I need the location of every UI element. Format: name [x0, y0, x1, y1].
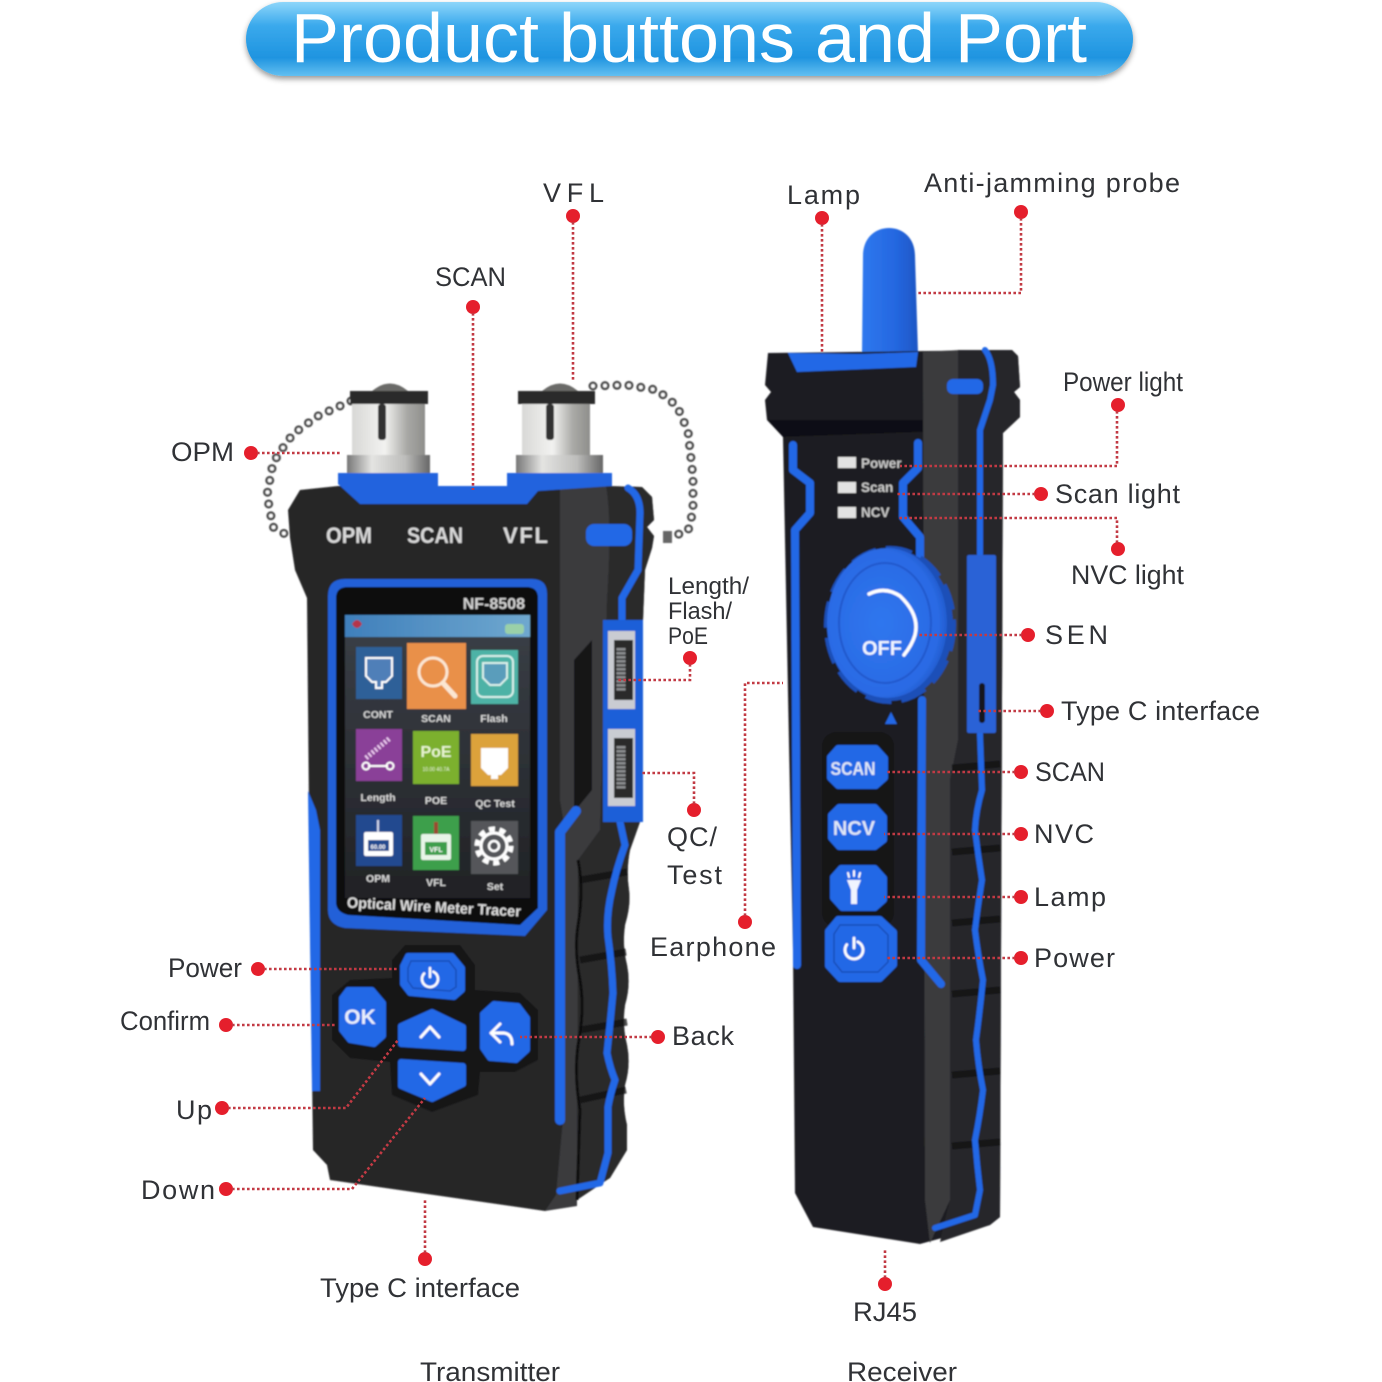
app tile PoE: POE — [425, 795, 447, 807]
callout SEN: SEN — [1045, 620, 1108, 650]
callout NVC light: NVC light — [1071, 560, 1184, 590]
app tile VFL: VFL — [426, 877, 446, 889]
receiver side block — [967, 555, 996, 733]
callout Scan light — [897, 479, 1180, 509]
app tile Length: Length — [360, 792, 396, 804]
receiver callouts — [787, 168, 1260, 1327]
receiver side panel — [940, 350, 1020, 1242]
knob — [827, 548, 953, 701]
callout Scan light: Scan light — [1055, 479, 1180, 509]
blue right inner stripe — [560, 811, 576, 1120]
top labels on device: OPM — [326, 523, 372, 548]
screen bezel — [328, 579, 547, 936]
callout Length Flash PoE: Flash/ — [668, 598, 732, 625]
app tile VFL — [413, 816, 459, 889]
callout Back — [520, 1021, 734, 1051]
callout Power right — [885, 943, 1115, 973]
app tile Set: Set — [487, 881, 504, 893]
button lamp — [833, 868, 884, 908]
strap slot — [586, 524, 632, 546]
callout QC Test — [640, 773, 722, 890]
callout Power light: Power light — [1063, 367, 1183, 397]
button cluster surround — [332, 945, 538, 1112]
status bar — [345, 615, 530, 637]
callout Type C receiver: Type C interface — [1061, 696, 1260, 726]
body side band — [545, 486, 610, 1211]
LED indicators: Scan — [861, 480, 893, 495]
blue left stripe — [308, 791, 320, 1091]
callout QC Test: QC/ — [667, 822, 717, 852]
transmitter callouts — [120, 178, 783, 1303]
body side panel — [577, 486, 654, 1200]
callout Back: Back — [672, 1021, 734, 1051]
LED indicators: NCV — [861, 505, 890, 520]
app tile OPM — [356, 815, 402, 885]
ball chain left — [267, 401, 351, 534]
callout Earphone: Earphone — [650, 932, 776, 962]
LED indicators: Power — [861, 456, 902, 471]
button back — [483, 1004, 527, 1060]
callout Anti-jamming probe — [917, 168, 1180, 293]
button SCAN: SCAN — [830, 759, 876, 779]
knob: OFF — [862, 638, 902, 660]
button down — [401, 1062, 463, 1099]
callout NVC light — [898, 518, 1184, 590]
app tile PoE: PoE — [420, 744, 452, 761]
screen side recess — [574, 640, 592, 812]
right trim — [903, 443, 941, 984]
callout Up — [176, 1040, 398, 1125]
callout Type C transmitter: Type C interface — [320, 1273, 520, 1303]
display — [345, 615, 530, 898]
app tile OPM: OPM — [366, 873, 390, 885]
callout Confirm — [120, 1006, 336, 1036]
callout Up: Up — [176, 1095, 212, 1125]
callout SEN — [917, 620, 1108, 650]
app tile VFL: VFL — [429, 847, 443, 854]
app tile CONT: CONT — [363, 709, 393, 721]
callout Lamp top: Lamp — [787, 180, 860, 210]
app tile CONT — [356, 647, 402, 721]
callout VFL — [543, 178, 604, 380]
callout OPM: OPM — [171, 437, 234, 467]
callout Down: Down — [141, 1175, 215, 1205]
app tile SCAN: SCAN — [421, 713, 451, 725]
antenna — [862, 228, 918, 353]
callout NVC: NVC — [1034, 819, 1094, 849]
callout NVC — [884, 819, 1094, 849]
title: Product buttons and Port — [291, 0, 1087, 77]
callout Earphone — [650, 683, 783, 962]
button power — [828, 919, 894, 979]
transmitter body — [288, 486, 654, 1211]
receiver side stripe — [935, 350, 993, 1228]
callout Length Flash PoE — [618, 573, 749, 680]
app tile OPM: 60.00 — [370, 845, 386, 851]
callout SCAN top: SCAN — [435, 262, 506, 292]
button NCV: NCV — [833, 818, 876, 840]
app tile SCAN — [407, 643, 466, 725]
app tile Flash — [471, 650, 518, 725]
receiver body — [765, 350, 1020, 1244]
callout SCAN right — [885, 757, 1105, 787]
callout Lamp right — [884, 882, 1106, 912]
callout Type C transmitter — [320, 1198, 520, 1303]
app tile Length — [356, 729, 402, 804]
LED indicators — [838, 456, 902, 520]
app tile PoE — [413, 731, 459, 807]
knob arrow — [885, 712, 897, 724]
callout Length Flash PoE: Length/ — [668, 573, 749, 600]
blue side stripe — [560, 488, 640, 1191]
callout VFL: VFL — [543, 178, 604, 208]
receiver blue cap — [788, 352, 918, 372]
callout Power left: Power — [168, 953, 242, 983]
connector OPM — [347, 384, 430, 475]
button column surround — [822, 732, 894, 927]
callout OPM — [171, 437, 342, 467]
blue top rim — [338, 473, 612, 504]
top labels on device — [326, 523, 548, 548]
app tile QC Test: QC Test — [475, 798, 515, 810]
screen caption: Optical Wire Meter Tracer — [347, 894, 521, 921]
callout RJ45 — [853, 1250, 917, 1327]
model name: NF-8508 — [463, 596, 525, 613]
app tile Set — [471, 821, 518, 893]
left trim — [793, 445, 810, 965]
screen — [336, 587, 538, 925]
app tile QC Test — [471, 734, 518, 810]
callout Power light — [900, 367, 1183, 466]
callout SCAN right: SCAN — [1035, 757, 1105, 787]
callout QC Test: Test — [667, 860, 722, 890]
callout Power left — [168, 953, 398, 983]
callout Lamp right: Lamp — [1034, 882, 1106, 912]
transmitter device — [267, 384, 693, 1211]
app tile Flash: Flash — [480, 713, 508, 725]
receiver middle band — [923, 350, 960, 1243]
button SCAN — [830, 748, 885, 786]
callout Confirm: Confirm — [120, 1006, 210, 1036]
callout Anti-jamming probe: Anti-jamming probe — [924, 168, 1180, 198]
callout Lamp top — [787, 180, 860, 352]
button OK — [342, 990, 383, 1044]
connector VFL — [516, 384, 603, 475]
button up — [401, 1012, 463, 1048]
top labels on device: SCAN — [407, 523, 463, 548]
callout Length Flash PoE: PoE — [668, 623, 708, 650]
app tile PoE: 10.00 40.7A — [423, 767, 450, 773]
callout Power right: Power — [1034, 943, 1115, 973]
grip shadows — [576, 860, 627, 1200]
callout Down — [141, 1098, 425, 1205]
callout RJ45: RJ45 — [853, 1297, 917, 1327]
receiver grip shadows — [952, 764, 1000, 1146]
strap slot — [947, 379, 983, 394]
receiver device — [765, 228, 1020, 1244]
top labels on device: VFL — [503, 523, 548, 548]
button NCV — [831, 807, 884, 847]
button power — [403, 956, 462, 997]
port panel — [603, 620, 643, 822]
button OK: OK — [344, 1006, 376, 1029]
receiver top shadow band — [768, 420, 923, 437]
ball chain right — [593, 385, 693, 543]
callout SCAN top — [435, 262, 506, 490]
